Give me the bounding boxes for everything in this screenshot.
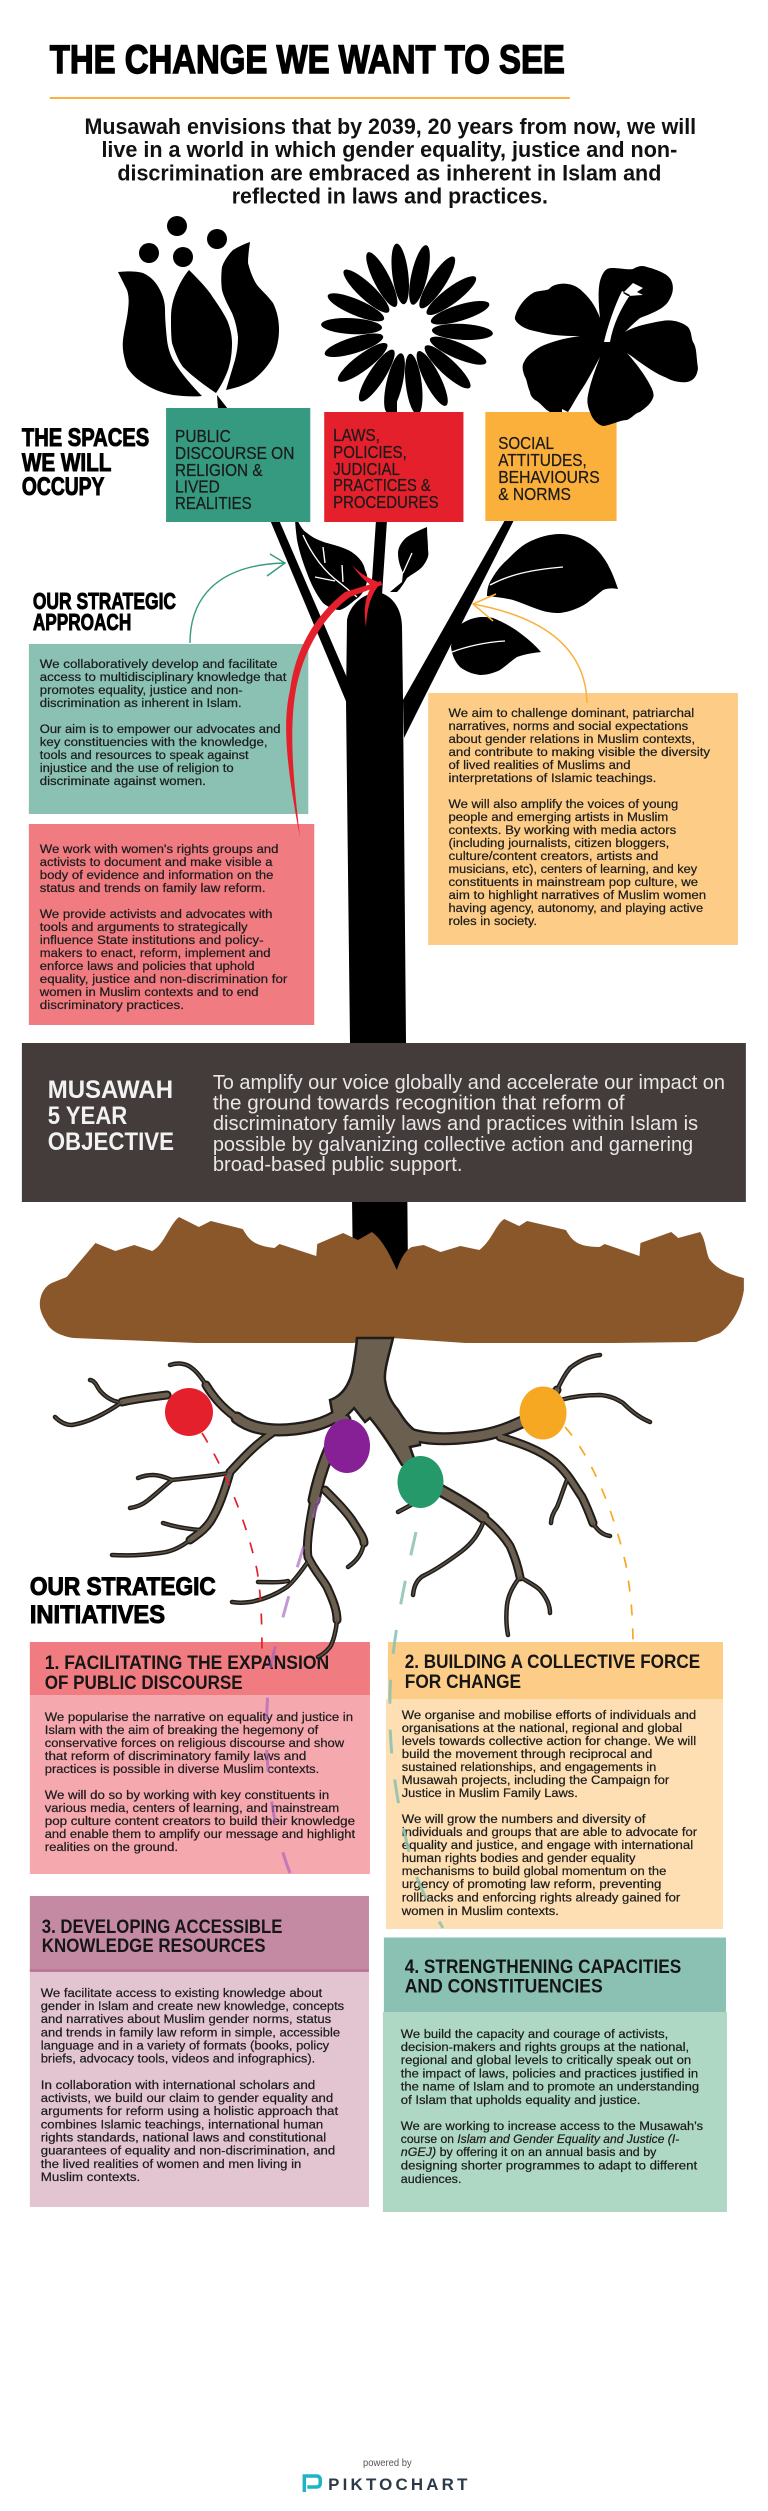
panel: approach social (orange): constituents in mainstream pop culture, we	[449, 875, 698, 889]
footer: powered by piktochart	[304, 2458, 468, 2494]
panel: initiative 4: AND CONSTITUENCIES	[405, 1976, 603, 1998]
panel: approach social (orange)	[428, 693, 738, 945]
intro statement: reflected in laws and practices.	[232, 183, 548, 209]
panel: approach laws (red)	[29, 824, 314, 1025]
panel: initiative 1: We popularise the narrative on equality and justice in	[45, 1710, 353, 1724]
panel: initiative 1: various media, centers of learning, and mainstream	[45, 1801, 339, 1815]
panel: initiative 3	[30, 1896, 369, 2207]
panel: initiative 3: guarantees of equality and non-discrimination, and	[41, 2144, 335, 2158]
panel: initiative 4	[383, 1938, 727, 2212]
text: social attitudes box label: & NORMS	[498, 484, 571, 504]
panel: initiative 3: language and in a variety of formats (books, policy	[41, 2039, 330, 2053]
panel: approach social (orange): of lived realities of Muslims and	[449, 758, 631, 772]
intro statement: live in a world in which gender equality, justice and non-	[101, 137, 677, 162]
text: public discourse box label: REALITIES	[175, 493, 252, 513]
panel: approach knowledge (green): tools and resources to speak against	[40, 748, 249, 762]
heading: our strategic initiatives: OUR STRATEGIC	[30, 1573, 216, 1601]
panel: initiative 2: individuals and groups that are able to advocate for	[402, 1825, 697, 1839]
panel: approach laws (red): women in Muslim contexts and to end	[39, 985, 259, 999]
panel: initiative 4: We build the capacity and courage of activists,	[401, 2027, 668, 2041]
panel: initiative 3: rights standards, national laws and constitutional	[41, 2131, 326, 2145]
text: social attitudes box label: ATTITUDES,	[498, 450, 587, 470]
panel: initiative 2: build the movement through reciprocal and	[402, 1747, 653, 1761]
panel: initiative 2: equality and justice, and engage with international	[402, 1838, 693, 1852]
text: public discourse box label: LIVED	[175, 476, 220, 497]
panel: the spaces boxes	[166, 408, 617, 522]
panel: initiative 2: levels towards collective action for change. We will	[402, 1734, 696, 1748]
panel: 5 year objective: broad-based public support.	[213, 1153, 462, 1176]
panel: initiative 2: sustained relationships, and engagements in	[402, 1760, 657, 1774]
panel: approach knowledge (green)	[29, 644, 308, 814]
panel: approach laws (red): equality, justice and non-discrimination for	[40, 972, 287, 986]
text: social attitudes box label	[498, 433, 600, 504]
panel: initiative 3: arguments for reform using a holistic approach that	[41, 2104, 339, 2118]
panel: 5 year objective: possible by galvanizing collective action and garnering	[213, 1133, 693, 1156]
text: public discourse box label	[175, 426, 294, 513]
intro statement: Musawah envisions that by 2039, 20 years from now, we will	[85, 114, 696, 139]
text: laws box label	[333, 425, 439, 512]
panel: initiative 1: Islam with the aim of breaking the hegemony of	[45, 1723, 319, 1737]
panel: approach social (orange): interpretations of Islamic teachings.	[449, 771, 656, 785]
panel: approach knowledge (green): We collaboratively develop and facilitate	[40, 657, 278, 671]
title: THE CHANGE WE WANT TO SEE	[50, 38, 565, 82]
panel: 5 year objective: 5 YEAR	[48, 1102, 127, 1130]
heading: the spaces we will occupy	[22, 424, 149, 501]
panel: initiative 2: organisations at the national, regional and global	[402, 1721, 682, 1735]
icon: daisy flower	[321, 243, 493, 415]
root marker: orange	[520, 1386, 566, 1440]
icon: tulip flower	[118, 216, 279, 396]
panel: approach laws (red): activists to document and make visible a	[40, 855, 273, 869]
footer: powered by piktochart: powered by	[363, 2458, 412, 2469]
panel: approach social (orange): musicians, etc), centers of learning, and key	[449, 862, 698, 876]
panel: initiative 1: realities on the ground.	[45, 1840, 178, 1854]
panel: initiative 2	[386, 1642, 723, 1929]
panel: 5 year objective	[22, 1043, 746, 1202]
panel: approach knowledge (green): discrimination as inherent in Islam.	[40, 696, 242, 710]
root marker: purple	[324, 1419, 370, 1473]
panel: 5 year objective: OBJECTIVE	[48, 1128, 174, 1156]
panel: approach knowledge (green): access to multidisciplinary knowledge that	[40, 670, 287, 684]
icon: hibiscus flower	[515, 266, 698, 426]
text: social attitudes box label: SOCIAL	[498, 433, 554, 453]
panel: approach knowledge (green): key constituencies with the knowledge,	[40, 735, 268, 749]
panel: initiative 1: conservative forces on religious discourse and show	[45, 1736, 344, 1750]
panel: initiative 3: briefs, advocacy tools, videos and infographics).	[41, 2052, 315, 2066]
panel: initiative 4: nGEJ) by offering it on an annual basis and by	[401, 2145, 657, 2159]
panel: initiative 2: 2. BUILDING A COLLECTIVE FORCE	[405, 1652, 700, 1673]
panel: 5 year objective: To amplify our voice globally and accelerate our impact on	[213, 1071, 725, 1094]
panel: initiative 3: 3. DEVELOPING ACCESSIBLE	[42, 1917, 282, 1938]
panel: approach social (orange): contexts. By working with media actors	[449, 823, 676, 837]
panel: approach laws (red): We work with women's rights groups and	[40, 842, 279, 856]
panel: initiative 2: rollbacks and enforcing rights already gained for	[402, 1890, 680, 1905]
root marker: green	[398, 1456, 444, 1508]
text: public discourse box label: DISCOURSE ON	[175, 443, 294, 463]
panel: approach knowledge (green): Our aim is to empower our advocates and	[40, 722, 281, 736]
panel: 5 year objective: the ground towards recognition that reform of	[213, 1091, 625, 1115]
panel: initiative 2: women in Muslim contexts.	[401, 1904, 559, 1918]
panel: initiative 3: gender in Islam and create new knowledge, concepts	[41, 1999, 344, 2013]
panel: initiative 3: KNOWLEDGE RESOURCES	[42, 1936, 266, 1957]
panel: initiative 1: and enable them to amplify our message and highlight	[45, 1827, 356, 1841]
title underline	[50, 97, 570, 99]
panel: approach social (orange): (including journalists, citizen bloggers,	[449, 836, 669, 850]
heading: the spaces we will occupy: OCCUPY	[22, 473, 105, 501]
panel: initiative 4: 4. STRENGTHENING CAPACITIES	[405, 1957, 681, 1978]
arrow: green to tree	[190, 554, 285, 643]
panel: approach social (orange): roles in society.	[449, 914, 537, 928]
panel: approach social (orange): and contribute to making visible the diversity	[449, 745, 711, 759]
dashed connector: purple	[266, 1497, 320, 1886]
intro statement: discrimination are embraced as inherent in Islam and	[117, 160, 661, 185]
panel: initiative 2: FOR CHANGE	[405, 1672, 521, 1693]
dashed connector: orange	[565, 1427, 633, 1647]
panel: initiative 3: We facilitate access to existing knowledge about	[41, 1986, 323, 2000]
panel: approach laws (red): enforce laws and policies that uphold	[40, 959, 255, 973]
panel: approach laws (red): status and trends on family law reform.	[40, 881, 266, 895]
arrow: orange to tree	[473, 594, 587, 703]
panel: initiative 4: the name of Islam and to promote an understanding	[401, 2080, 699, 2094]
panel: 5 year objective: MUSAWAH	[48, 1076, 173, 1104]
panel: approach laws (red): body of evidence and information on the	[40, 868, 274, 882]
panel: initiative 1: pop culture content creators to build their knowledge	[45, 1814, 355, 1828]
panel: initiative 2: We will grow the numbers and diversity of	[402, 1812, 646, 1826]
text: public discourse box label: RELIGION &	[175, 460, 263, 480]
panel: initiative 4: course on Islam and Gender Equality and Justice (I-	[401, 2132, 679, 2146]
panel: approach laws (red): tools and arguments to strategically	[40, 920, 249, 934]
panel: initiative 2: Musawah projects, including the Campaign for	[402, 1773, 669, 1787]
panel: initiative 3: combines Islamic teachings, international human	[41, 2117, 323, 2132]
panel: initiative 4: designing shorter programmes to adapt to different	[401, 2159, 698, 2173]
dashed connector: red	[202, 1433, 262, 1660]
panel: approach social (orange): culture/content creators, artists and	[449, 849, 659, 863]
heading: the spaces we will occupy: THE SPACES	[22, 424, 149, 452]
root marker: red	[165, 1388, 213, 1436]
panel: initiative 3: In collaboration with international scholars and	[41, 2078, 315, 2092]
panel: approach social (orange): having agency, autonomy, and playing active	[449, 901, 703, 915]
text: laws box label: LAWS,	[333, 425, 380, 445]
panel: initiative 4: of Islam that upholds equality and justice.	[401, 2093, 640, 2107]
intro statement	[85, 114, 696, 209]
panel: initiative 2: Justice in Muslim Family Laws.	[402, 1786, 578, 1800]
dashed connector: green	[390, 1532, 443, 1928]
text: public discourse box label: PUBLIC	[175, 426, 231, 446]
heading: our strategic initiatives: INITIATIVES	[30, 1601, 165, 1629]
panel: approach social (orange): people and emerging artists in Muslim	[449, 810, 668, 824]
heading: our strategic approach: APPROACH	[33, 609, 131, 635]
text: laws box label: PROCEDURES	[333, 492, 439, 512]
tree stems, trunk and leaves	[217, 395, 618, 1275]
heading: our strategic initiatives	[30, 1573, 216, 1629]
panel: approach laws (red): discriminatory practices.	[40, 998, 184, 1012]
panel: approach laws (red): influence State institutions and policy-	[40, 933, 264, 947]
panel: initiative 3: and trends in family law reform in simple, accessible	[41, 2025, 340, 2040]
footer: powered by piktochart: PIKTOCHART	[328, 2475, 468, 2494]
panel: initiative 2: urgency of promoting law reform, preventing	[402, 1877, 662, 1891]
tree roots	[55, 1338, 650, 1657]
panel: initiative 4: the impact of laws, policies and practices justified in	[401, 2066, 698, 2081]
panel: initiative 3: the lived realities of women and men living in	[41, 2157, 302, 2171]
panel: approach laws (red): makers to enact, reform, implement and	[40, 946, 271, 960]
panel: initiative 2: mechanisms to build global momentum on the	[402, 1864, 666, 1878]
panel: approach knowledge (green): promotes equality, justice and non-	[40, 683, 243, 697]
panel: 5 year objective: discriminatory family laws and practices within Islam is	[213, 1112, 698, 1135]
panel: approach social (orange): narratives, norms and social expectations	[449, 719, 688, 733]
panel: initiative 3: and narratives about Muslim gender norms, status	[41, 2012, 331, 2026]
text: laws box label: PRACTICES &	[333, 475, 431, 495]
text: laws box label: POLICIES,	[333, 442, 407, 462]
panel: approach laws (red): We provide activists and advocates with	[40, 907, 273, 921]
panel: approach social (orange): aim to highlight narratives of Muslim women	[449, 888, 706, 902]
panel: initiative 2: We organise and mobilise efforts of individuals and	[402, 1708, 696, 1722]
panel: approach social (orange): about gender relations in Muslim contexts,	[449, 732, 695, 746]
heading: our strategic approach: OUR STRATEGIC	[33, 588, 176, 614]
panel: initiative 1: practices is possible in diverse Muslim contexts.	[45, 1762, 319, 1776]
panel: approach knowledge (green): discriminate against women.	[40, 774, 206, 788]
panel: initiative 4: We are working to increase access to the Musawah's	[401, 2119, 703, 2133]
panel: initiative 4: decision-makers and rights groups at the national,	[401, 2040, 689, 2054]
soil mound	[40, 1217, 744, 1343]
panel: initiative 1: 1. FACILITATING THE EXPANSION	[45, 1653, 329, 1674]
panel: initiative 3: activists, we build our claim to gender equality and	[41, 2091, 333, 2105]
panel: approach social (orange): We aim to challenge dominant, patriarchal	[449, 706, 694, 720]
panel: initiative 3: Muslim contexts.	[41, 2170, 140, 2184]
heading: our strategic approach	[33, 588, 176, 635]
panel: initiative 1: that reform of discriminatory family laws and	[45, 1749, 307, 1763]
text: laws box label: JUDICIAL	[333, 459, 400, 479]
heading: the spaces we will occupy: WE WILL	[22, 449, 111, 477]
panel: initiative 1: We will do so by working with key constituents in	[45, 1788, 329, 1802]
panel: initiative 1: OF PUBLIC DISCOURSE	[45, 1673, 243, 1694]
arrow: red to tree	[286, 565, 382, 837]
panel: initiative 1	[30, 1642, 370, 1874]
panel: approach knowledge (green): injustice and the use of religion to	[40, 761, 234, 775]
panel: initiative 4: regional and global levels to critically speak out on	[401, 2053, 691, 2067]
panel: initiative 4: audiences.	[401, 2172, 461, 2186]
text: social attitudes box label: BEHAVIOURS	[498, 467, 600, 487]
panel: initiative 2: human rights bodies and gender equality	[402, 1851, 636, 1865]
panel: approach social (orange): We will also amplify the voices of young	[449, 797, 678, 811]
